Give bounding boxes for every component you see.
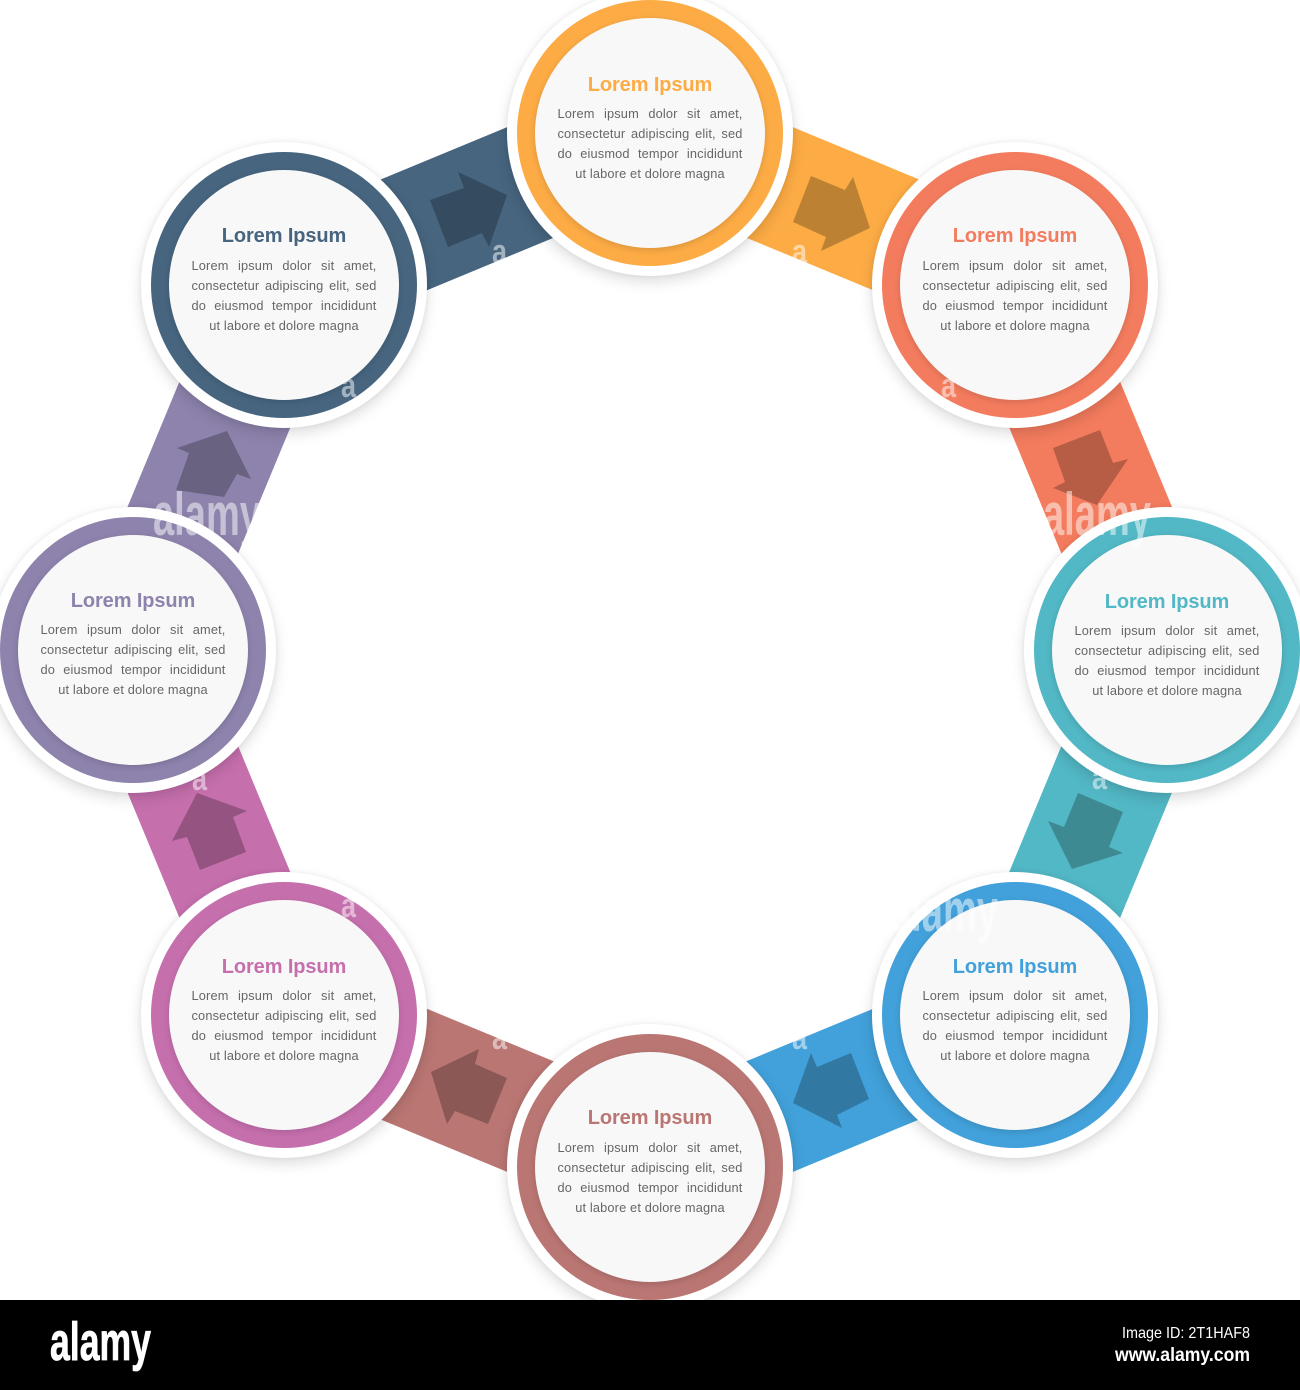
footer bar xyxy=(0,1300,1300,1390)
text block xyxy=(40,622,226,697)
watermarks: a xyxy=(792,233,808,271)
text block: ut labore et dolore magna xyxy=(940,318,1090,333)
band: coral to teal xyxy=(997,352,1184,582)
text block: Lorem ipsum dolor sit amet, xyxy=(922,988,1108,1003)
band: blue to brown xyxy=(717,997,948,1184)
heading: Lorem Ipsum xyxy=(588,1107,712,1129)
text block: ut labore et dolore magna xyxy=(209,1048,359,1063)
heading: Lorem Ipsum xyxy=(953,956,1077,978)
text block: Lorem ipsum dolor sit amet, xyxy=(558,1140,742,1155)
text block: do eiusmod tempor incididunt xyxy=(192,298,376,313)
text block: consectetur adipiscing elit, sed xyxy=(922,278,1108,293)
text block: consectetur adipiscing elit, sed xyxy=(922,1008,1108,1023)
watermarks: a xyxy=(941,367,957,405)
heading: Lorem Ipsum xyxy=(222,956,346,978)
watermarks: a xyxy=(492,1019,508,1057)
node: pink lower left xyxy=(141,872,427,1158)
node: coral upper right xyxy=(872,142,1158,428)
watermarks: a xyxy=(341,887,357,925)
band: pink to purple xyxy=(115,717,303,948)
text block: do eiusmod tempor incididunt xyxy=(922,298,1108,313)
text block: do eiusmod tempor incididunt xyxy=(192,1028,376,1043)
text block: Lorem ipsum dolor sit amet, xyxy=(1074,623,1260,638)
band: purple to navy xyxy=(115,352,303,582)
text block: do eiusmod tempor incididunt xyxy=(558,1180,742,1195)
text block: consectetur adipiscing elit, sed xyxy=(40,642,226,657)
text block: ut labore et dolore magna xyxy=(58,682,208,697)
node: orange top xyxy=(507,0,793,276)
watermarks: alamy xyxy=(1043,481,1151,548)
text block xyxy=(922,258,1108,333)
watermarks: a xyxy=(1092,759,1108,797)
node: purple left xyxy=(0,507,276,793)
text block: Lorem ipsum dolor sit amet, xyxy=(192,258,376,273)
heading: Lorem Ipsum xyxy=(1105,591,1229,613)
text block xyxy=(1074,623,1260,698)
band: navy to orange xyxy=(352,115,583,302)
text block: ut labore et dolore magna xyxy=(209,318,359,333)
heading: Lorem Ipsum xyxy=(222,225,346,247)
text block: consectetur adipiscing elit, sed xyxy=(192,1008,376,1023)
text block: ut labore et dolore magna xyxy=(1092,683,1242,698)
website: www.alamy.com xyxy=(1114,1345,1250,1366)
band: brown to pink xyxy=(352,997,583,1184)
text block xyxy=(558,106,742,181)
node: navy upper left xyxy=(141,142,427,428)
alamy logo: alamy xyxy=(50,1312,151,1372)
text block xyxy=(558,1140,742,1215)
watermarks: alamy xyxy=(890,877,998,944)
text block: do eiusmod tempor incididunt xyxy=(922,1028,1108,1043)
band: orange to coral xyxy=(717,115,948,302)
text block xyxy=(192,988,376,1063)
text block: consectetur adipiscing elit, sed xyxy=(558,126,742,141)
text block: consectetur adipiscing elit, sed xyxy=(558,1160,742,1175)
heading: Lorem Ipsum xyxy=(71,590,195,612)
watermarks: alamy xyxy=(153,481,261,548)
text block: Lorem ipsum dolor sit amet, xyxy=(40,622,226,637)
node: teal right xyxy=(1024,507,1300,793)
text block xyxy=(922,988,1108,1063)
text block: ut labore et dolore magna xyxy=(940,1048,1090,1063)
text block: Lorem ipsum dolor sit amet, xyxy=(922,258,1108,273)
text block: ut labore et dolore magna xyxy=(575,1200,725,1215)
heading: Lorem Ipsum xyxy=(953,225,1077,247)
text block: ut labore et dolore magna xyxy=(575,166,725,181)
text block: Lorem ipsum dolor sit amet, xyxy=(558,106,742,121)
heading: Lorem Ipsum xyxy=(588,74,712,96)
text block: do eiusmod tempor incididunt xyxy=(1074,663,1260,678)
watermarks: a xyxy=(192,760,208,798)
watermarks: a xyxy=(492,233,508,271)
text block: consectetur adipiscing elit, sed xyxy=(192,278,376,293)
text block: do eiusmod tempor incididunt xyxy=(558,146,742,161)
text block: consectetur adipiscing elit, sed xyxy=(1074,643,1260,658)
text block: Lorem ipsum dolor sit amet, xyxy=(192,988,376,1003)
image id: Image ID: 2T1HAF8 xyxy=(1122,1325,1250,1342)
watermarks: a xyxy=(792,1019,808,1057)
text block xyxy=(192,258,376,333)
text block: do eiusmod tempor incididunt xyxy=(40,662,226,677)
band: teal to blue xyxy=(997,717,1184,948)
node: brown bottom xyxy=(507,1024,793,1310)
watermarks: a xyxy=(341,367,357,405)
node: blue lower right xyxy=(872,872,1158,1158)
